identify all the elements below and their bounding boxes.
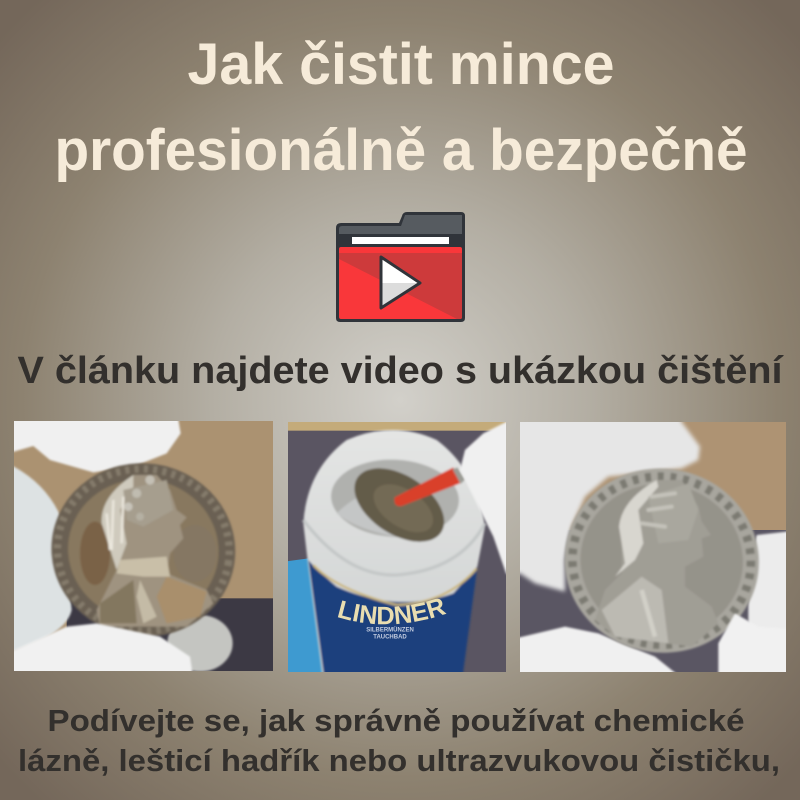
jar label xyxy=(308,560,477,683)
photo: coin in Lindner silver dip jar: SILBERMÜNZEN xyxy=(366,626,414,633)
white dish xyxy=(14,466,74,651)
blue cloth xyxy=(288,558,324,672)
glove xyxy=(460,422,506,575)
jar body xyxy=(303,430,485,683)
tarnished coin xyxy=(50,462,236,636)
jar opening xyxy=(329,456,461,540)
jar label text: LINDNER xyxy=(338,598,446,624)
body text xyxy=(18,703,780,778)
top glove xyxy=(14,421,182,474)
photo: tarnished coin held in gloved fingers xyxy=(14,421,273,671)
second coin xyxy=(167,615,233,672)
clean coin xyxy=(564,467,760,654)
upper glove xyxy=(508,410,700,592)
icon: video folder xyxy=(336,212,465,322)
photo: coin in Lindner silver dip jar: TAUCHBAD xyxy=(373,635,407,641)
right finger xyxy=(716,612,750,672)
subheading: V článku najdete video s ukázkou čištění xyxy=(18,350,784,392)
right glove xyxy=(746,530,786,630)
bust xyxy=(595,480,718,647)
title xyxy=(54,32,748,183)
lower glove xyxy=(520,625,676,672)
bottom glove xyxy=(14,622,194,671)
coin in bath xyxy=(353,467,446,543)
body text: lázně, lešticí hadřík nebo ultrazvukovou čističku, xyxy=(18,743,780,778)
photo: cleaned coin held in gloved fingers xyxy=(520,422,786,672)
title: profesionálně a bezpečně xyxy=(54,118,748,183)
bust xyxy=(97,475,213,627)
photo: coin in Lindner silver dip jar xyxy=(288,422,506,672)
title: Jak čistit mince xyxy=(188,32,614,97)
red tweezers xyxy=(394,467,460,506)
body text: Podívejte se, jak správně používat chemické xyxy=(48,703,744,738)
